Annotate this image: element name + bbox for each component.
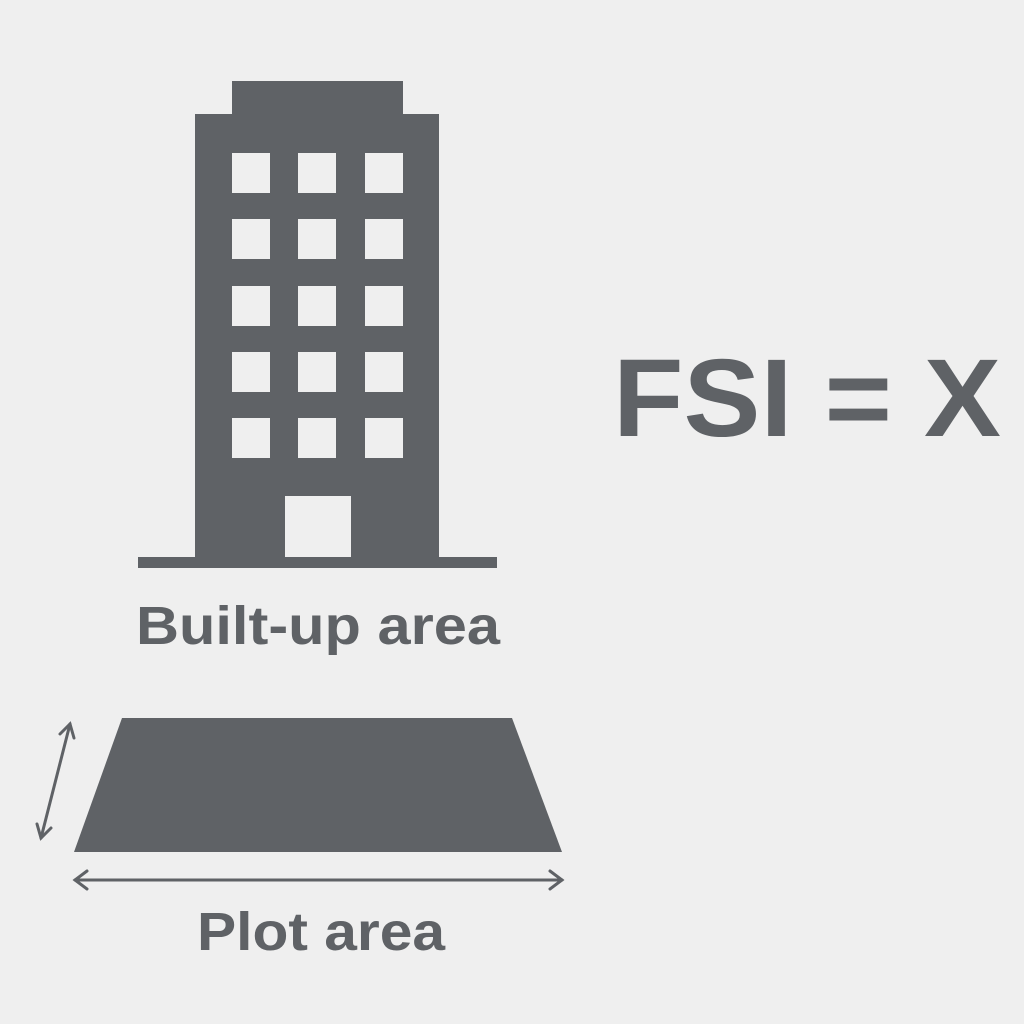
- plot shape: [74, 718, 562, 852]
- label: plot area: Plot area: [197, 902, 446, 962]
- formula: FSI = X: FSI = X: [613, 337, 1001, 460]
- arrow: plot depth: [37, 724, 74, 838]
- label: built-up area: Built-up area: [136, 596, 501, 656]
- icon: building: [138, 81, 497, 568]
- arrow: plot width: [75, 871, 562, 889]
